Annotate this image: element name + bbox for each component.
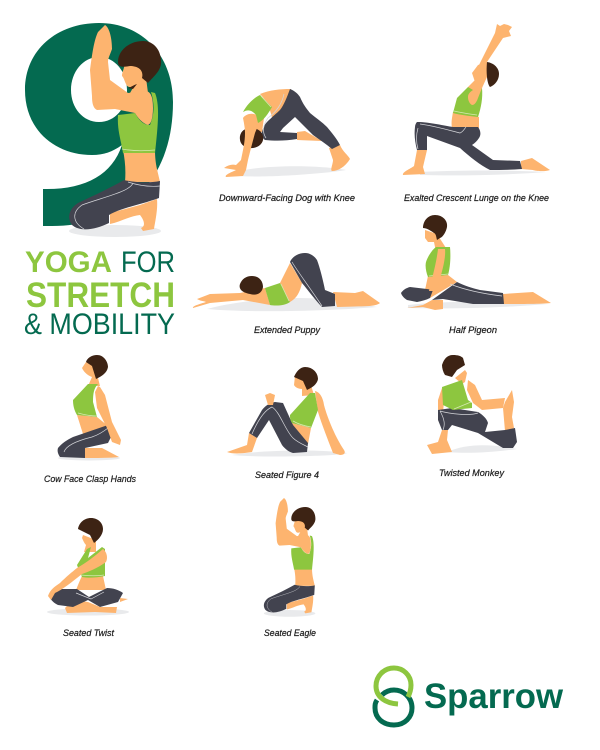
caption: Seated Eagle <box>264 628 316 639</box>
hair <box>487 62 499 87</box>
top hem <box>281 284 289 301</box>
leggings stitching <box>440 411 478 430</box>
caption: Seated Figure 4 <box>255 470 319 481</box>
caption: Downward-Facing Dog with Knee <box>219 193 355 204</box>
legs <box>264 585 315 612</box>
top hem <box>261 96 271 107</box>
sports top <box>243 95 272 123</box>
rear foot <box>521 158 550 171</box>
hair <box>78 518 103 543</box>
legs <box>69 180 160 229</box>
sports top <box>290 393 318 428</box>
arm <box>429 249 445 291</box>
leggings stitching <box>76 592 104 599</box>
supporting arm <box>438 388 445 412</box>
caption: Extended Puppy <box>254 325 321 336</box>
pose: seated eagle small <box>264 498 315 617</box>
legs <box>290 253 335 307</box>
hair <box>240 276 263 295</box>
midriff <box>294 568 315 586</box>
foot <box>85 448 119 458</box>
sports top <box>426 247 450 277</box>
light upper ring <box>376 668 411 704</box>
YOGA: YOGA <box>25 246 112 279</box>
sports top <box>442 380 472 410</box>
caption: Twisted Monkey <box>439 468 505 479</box>
top hem <box>81 574 104 577</box>
top hem <box>429 274 448 276</box>
top hem <box>122 149 155 151</box>
pose: exalted crescent lunge on the knee <box>403 24 550 175</box>
neck and face <box>294 376 314 396</box>
pose: seated figure 4 <box>227 367 347 456</box>
pose: twisted monkey <box>427 355 517 454</box>
caption: Cow Face Clasp Hands <box>44 474 136 485</box>
FOR: FOR <box>121 246 175 279</box>
legs <box>249 402 308 453</box>
legs <box>58 425 112 458</box>
midriff <box>260 89 291 118</box>
face <box>472 62 487 88</box>
hand on knee <box>265 393 275 405</box>
leggings stitching <box>292 262 322 306</box>
legs <box>438 408 517 448</box>
sports top <box>291 536 314 570</box>
legs <box>50 588 123 607</box>
leggings stitching <box>450 284 502 296</box>
legs <box>415 122 522 170</box>
hair <box>423 215 447 240</box>
pose: seated twist <box>47 518 129 616</box>
front foot <box>297 131 322 141</box>
leggings stitching <box>416 124 466 149</box>
large numeral 9 <box>25 23 173 226</box>
shadow <box>69 225 161 237</box>
back arm <box>315 391 345 455</box>
front shin and hand <box>427 430 452 454</box>
shadow <box>447 445 517 453</box>
midriff <box>280 263 302 302</box>
midriff <box>77 415 108 434</box>
pose: extended puppy <box>193 253 380 311</box>
wordmark: Sparrow <box>424 677 564 716</box>
title <box>24 246 175 341</box>
dark lower ring <box>375 690 412 725</box>
arms and hands <box>193 288 270 308</box>
shin and foot <box>333 291 380 307</box>
shadow <box>207 298 377 311</box>
raised arm and hand <box>475 24 512 88</box>
arm and hand <box>95 386 121 445</box>
neck and face <box>82 535 96 552</box>
leggings stitching <box>64 428 108 452</box>
midriff <box>288 423 311 444</box>
hair <box>442 355 465 377</box>
neck and face <box>425 230 446 252</box>
pose: half pigeon <box>401 215 551 310</box>
caption: Seated Twist <box>63 628 114 639</box>
pose: downward-facing dog with knee <box>224 89 350 177</box>
midriff <box>452 112 479 128</box>
arm and hand <box>48 549 107 600</box>
caption: Half Pigeon <box>449 325 497 336</box>
legs <box>401 282 504 304</box>
shadow <box>58 456 120 460</box>
arms and hands <box>224 114 260 177</box>
main figure: seated eagle large <box>69 25 161 237</box>
sports top <box>118 92 158 153</box>
midriff <box>76 576 106 590</box>
front shin and foot <box>403 150 427 175</box>
leggings stitching <box>252 407 308 447</box>
legs <box>261 89 340 149</box>
raised foot <box>503 390 514 431</box>
hair <box>86 355 108 379</box>
back foot and shin <box>110 199 157 231</box>
shin foot <box>227 433 257 454</box>
back foot and shin <box>287 595 313 613</box>
leggings stitching <box>75 182 160 229</box>
hair <box>118 41 161 83</box>
front foot <box>407 300 443 310</box>
pose: cow face clasp hands <box>58 355 121 460</box>
neck and face <box>294 519 308 536</box>
top hem <box>454 402 471 409</box>
leggings stitching <box>267 586 300 612</box>
raised arm <box>467 380 505 410</box>
jaw strand <box>128 84 137 89</box>
shadow <box>240 166 346 176</box>
sports top <box>265 283 290 306</box>
neck <box>455 370 467 384</box>
shadow <box>264 610 315 617</box>
rear foot <box>329 145 350 171</box>
top hem <box>293 421 311 427</box>
hair <box>291 507 315 530</box>
caption: Exalted Crescent Lunge on the Knee <box>404 193 549 204</box>
STRETCH: STRETCH <box>26 276 175 315</box>
sports top <box>73 384 98 417</box>
crossed feet <box>65 598 128 613</box>
sports top <box>453 87 482 117</box>
logo rings <box>375 668 412 725</box>
arms and hands <box>90 25 153 125</box>
top hem <box>454 111 477 115</box>
leggings stitching <box>264 94 284 138</box>
hair <box>240 128 263 148</box>
neck and face <box>82 362 100 386</box>
rear shin and foot <box>503 292 551 304</box>
arms and hands <box>276 498 311 554</box>
midriff <box>425 275 457 298</box>
Sparrow logo <box>375 668 564 725</box>
neck and face <box>122 62 148 93</box>
shadow <box>408 302 548 308</box>
chest <box>468 80 482 112</box>
shadow <box>47 608 129 616</box>
shadow <box>420 170 546 175</box>
sports top <box>77 547 105 578</box>
& MOBILITY: & MOBILITY <box>24 308 175 341</box>
neck <box>252 115 264 132</box>
hair <box>294 367 318 390</box>
midriff <box>123 150 160 182</box>
top hem <box>78 413 97 416</box>
shadow <box>232 451 347 456</box>
